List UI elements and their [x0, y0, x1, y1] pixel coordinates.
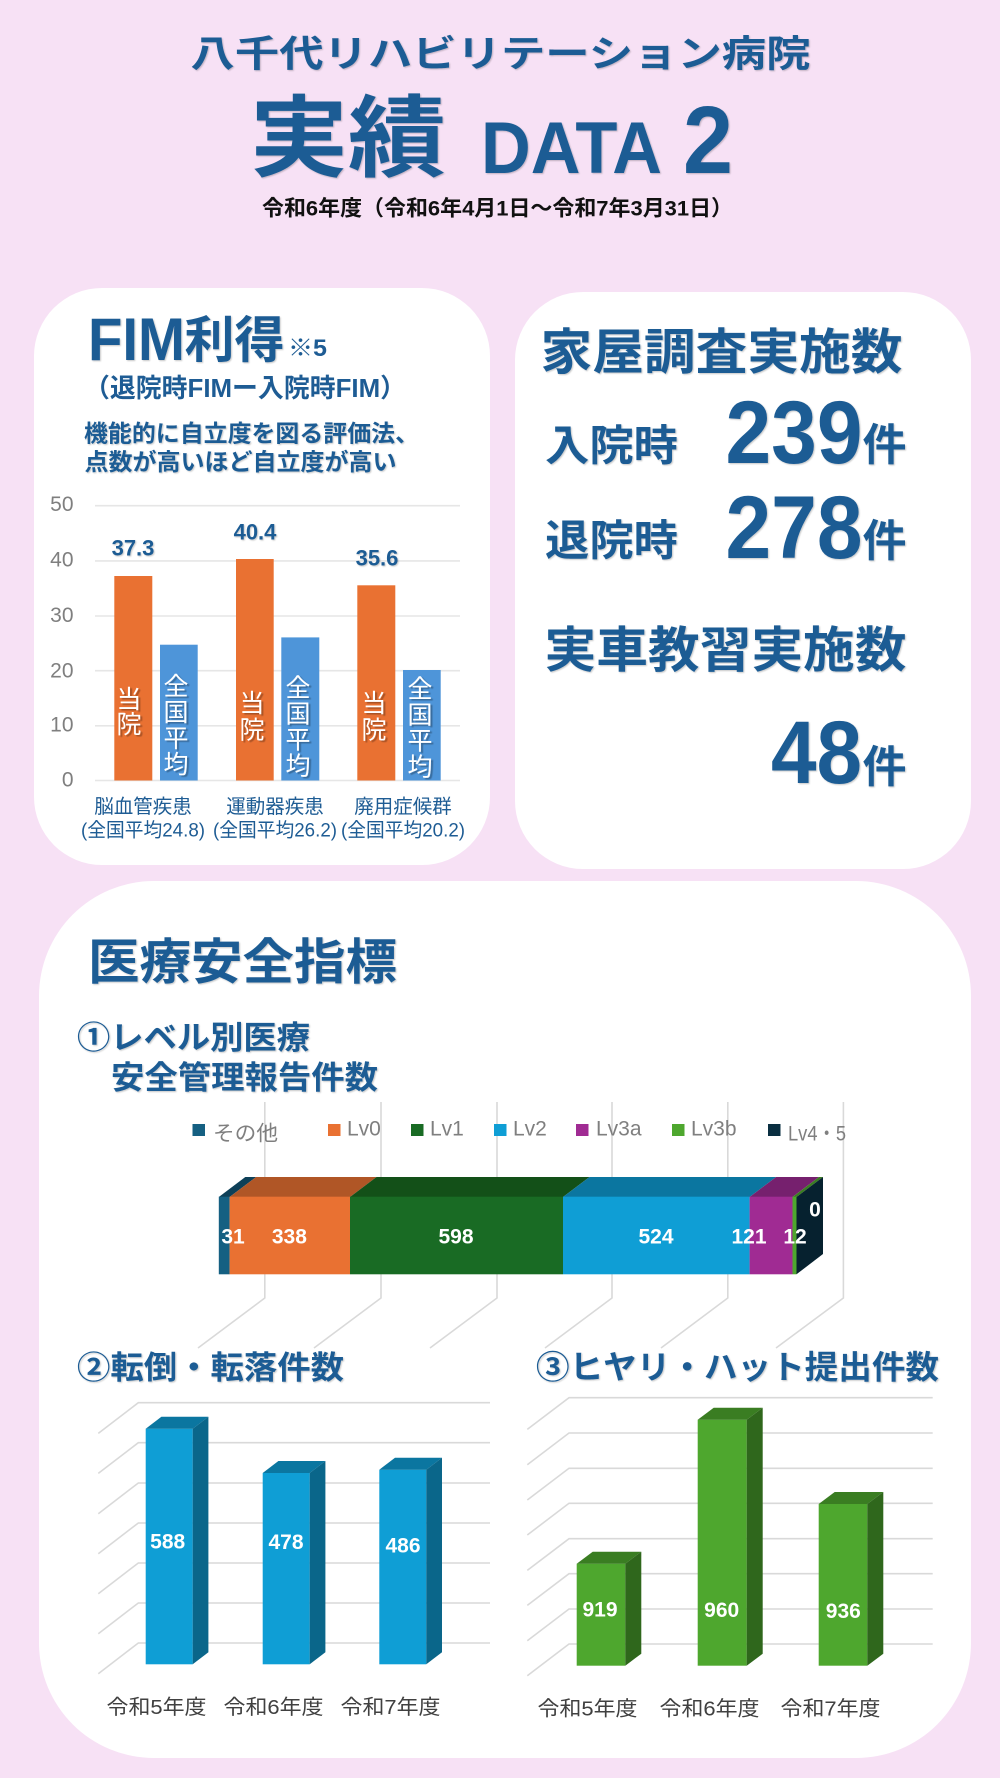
bars: 廃用症候群 [356, 546, 441, 782]
heading: medical safety indicators: 医療安全指標 [88, 936, 397, 990]
year labels: 令和6年度 [660, 1698, 760, 1720]
bar: 令和7年度 486: 486 [385, 1534, 421, 1558]
category labels: 廃用症候群 [354, 796, 452, 818]
year labels: 令和5年度 [538, 1698, 638, 1720]
bars: 運動器疾患: 院 [239, 716, 265, 744]
3D bar chart: near-miss reports [527, 1398, 933, 1720]
legend: Lv0 [347, 1118, 381, 1140]
axis labels [50, 493, 74, 792]
legend: その他 [213, 1122, 278, 1146]
legend: Lv4・5 [788, 1122, 846, 1146]
bars: 脳血管疾患 [112, 536, 198, 780]
panel: home visits and driving practice [515, 292, 971, 869]
category labels: 運動器疾患 [226, 796, 324, 818]
stat: on admission: 件 [862, 421, 906, 470]
title: DATA: DATA [481, 108, 662, 189]
year labels: 令和7年度 [780, 1698, 880, 1720]
bar data labels: 31 [221, 1226, 245, 1248]
axis labels: 10 [50, 714, 74, 736]
bars: 脳血管疾患: 国 [163, 699, 189, 727]
legend [192, 1118, 846, 1146]
bars: 運動器疾患 [234, 520, 319, 780]
legend: Lv3b [691, 1118, 737, 1140]
category labels [81, 796, 465, 842]
axis labels: 20 [50, 660, 74, 682]
title: number 2: 2 [683, 87, 733, 194]
panel: FIM gain [34, 288, 490, 865]
heading: driving practice count: 実車教習実施数 [544, 624, 906, 678]
bar: 令和7年度 936 [819, 1492, 883, 1666]
bars: 脳血管疾患: 院 [116, 711, 142, 739]
description text [84, 420, 419, 475]
bars: 運動器疾患: 国 [285, 700, 311, 728]
sub-heading 1: 安全管理報告件数 [111, 1060, 378, 1096]
axis labels: 40 [50, 548, 74, 572]
legend: Lv1 [430, 1118, 464, 1140]
stacked 3D bar chart: reports by level [192, 1102, 846, 1348]
bar front segments [219, 1177, 823, 1274]
sub-heading 2: ②転倒・転落件数 [77, 1350, 344, 1386]
bar: 令和5年度 919: 919 [582, 1598, 618, 1622]
bar: 令和7年度 486 [379, 1458, 442, 1664]
year labels: 令和5年度 [106, 1696, 206, 1719]
sub-heading 1: ①レベル別医療 [77, 1020, 310, 1056]
formula text: （退院時FIMー入院時FIM） [84, 373, 406, 403]
legend: Lv3a [596, 1118, 642, 1140]
bar data labels: 524 [638, 1226, 674, 1248]
axis labels: 50 [50, 493, 74, 516]
bar: 令和5年度 588: 588 [150, 1530, 186, 1554]
category labels: (全国平均26.2) [213, 820, 337, 842]
axis labels: 0 [62, 768, 74, 792]
period text: 令和6年度（令和6年4月1日～令和7年3月31日） [262, 196, 733, 220]
bar: 令和6年度 478: 478 [268, 1531, 304, 1554]
bars: 運動器疾患: 40.4 [234, 520, 277, 545]
category labels: (全国平均24.8) [81, 820, 205, 842]
bar data labels: 338 [272, 1226, 307, 1248]
bars: 廃用症候群: 均 [407, 754, 433, 782]
bar: 令和6年度 960 [698, 1408, 763, 1666]
bar: 令和6年度 960: 960 [704, 1599, 739, 1622]
bar top faces [219, 1177, 823, 1197]
stat: on discharge: 退院時 [545, 518, 678, 566]
bars: 脳血管疾患: 当 [116, 686, 142, 714]
stat: on admission: 239 [726, 382, 862, 482]
bar chart: FIM gain by disease group [50, 493, 465, 842]
bars: 運動器疾患: 平 [285, 726, 311, 754]
bars: 運動器疾患: 当 [239, 690, 265, 718]
bar: 令和6年度 478 [263, 1461, 325, 1664]
year labels: 令和7年度 [340, 1696, 440, 1719]
header: title block [190, 34, 810, 220]
footnote mark: ※5 [288, 335, 327, 362]
stat: on admission: 入院時 [545, 424, 678, 470]
bars: 廃用症候群: 35.6 [356, 546, 398, 571]
year labels [538, 1698, 880, 1720]
category labels: 脳血管疾患 [94, 796, 192, 818]
sub-heading 3: ③ヒヤリ・ハット提出件数 [536, 1350, 939, 1386]
bars: 運動器疾患: 均 [285, 752, 311, 780]
bars: 廃用症候群: 全 [407, 676, 433, 704]
bars: 運動器疾患: 全 [285, 674, 311, 702]
heading: home visit count: 家屋調査実施数 [540, 326, 902, 380]
title: hospital name: 八千代リハビリテーション病院 [190, 34, 810, 74]
legend: Lv2 [513, 1118, 547, 1140]
bars: 廃用症候群: 当 [361, 690, 387, 718]
bars: 脳血管疾患: 均 [163, 751, 189, 779]
stat: on discharge [545, 477, 906, 577]
sub-heading 1 [77, 1020, 378, 1096]
axis labels: 30 [50, 604, 74, 627]
stat: on discharge: 件 [862, 517, 906, 566]
stat: driving practice: 48 [771, 702, 862, 802]
year labels: 令和6年度 [224, 1696, 324, 1719]
panel: medical safety indicators [39, 881, 971, 1758]
heading: 利得: 利得 [184, 312, 284, 368]
bars: 廃用症候群: 院 [361, 716, 387, 744]
bars: 廃用症候群: 平 [407, 728, 433, 756]
bar data labels [221, 1198, 821, 1248]
bar data labels: 121 [731, 1226, 767, 1248]
description text: 点数が高いほど自立度が高い [84, 448, 396, 475]
bar: 令和5年度 919 [577, 1552, 641, 1666]
bars: 廃用症候群: 国 [407, 702, 433, 730]
year labels [106, 1696, 440, 1719]
bar: 令和5年度 588 [146, 1417, 208, 1664]
bars: 脳血管疾患: 全 [163, 673, 189, 701]
title: 実績: 実績 [250, 88, 446, 188]
3D bar chart: falls [98, 1403, 490, 1719]
bar data labels: 12 [783, 1226, 807, 1248]
bar: 令和7年度 936: 936 [826, 1600, 861, 1623]
bar data labels: 0 [809, 1198, 821, 1222]
bar data labels: 598 [438, 1226, 474, 1248]
stat: on discharge: 278 [726, 477, 862, 577]
description text: 機能的に自立度を図る評価法、 [84, 420, 419, 446]
bars: 脳血管疾患: 37.3 [112, 536, 154, 561]
bars: 脳血管疾患: 平 [163, 725, 189, 753]
heading: FIM: FIM [88, 306, 185, 373]
category labels: (全国平均20.2) [341, 820, 465, 842]
stat: on admission [545, 382, 906, 482]
stat: driving practice: 件 [862, 743, 906, 792]
